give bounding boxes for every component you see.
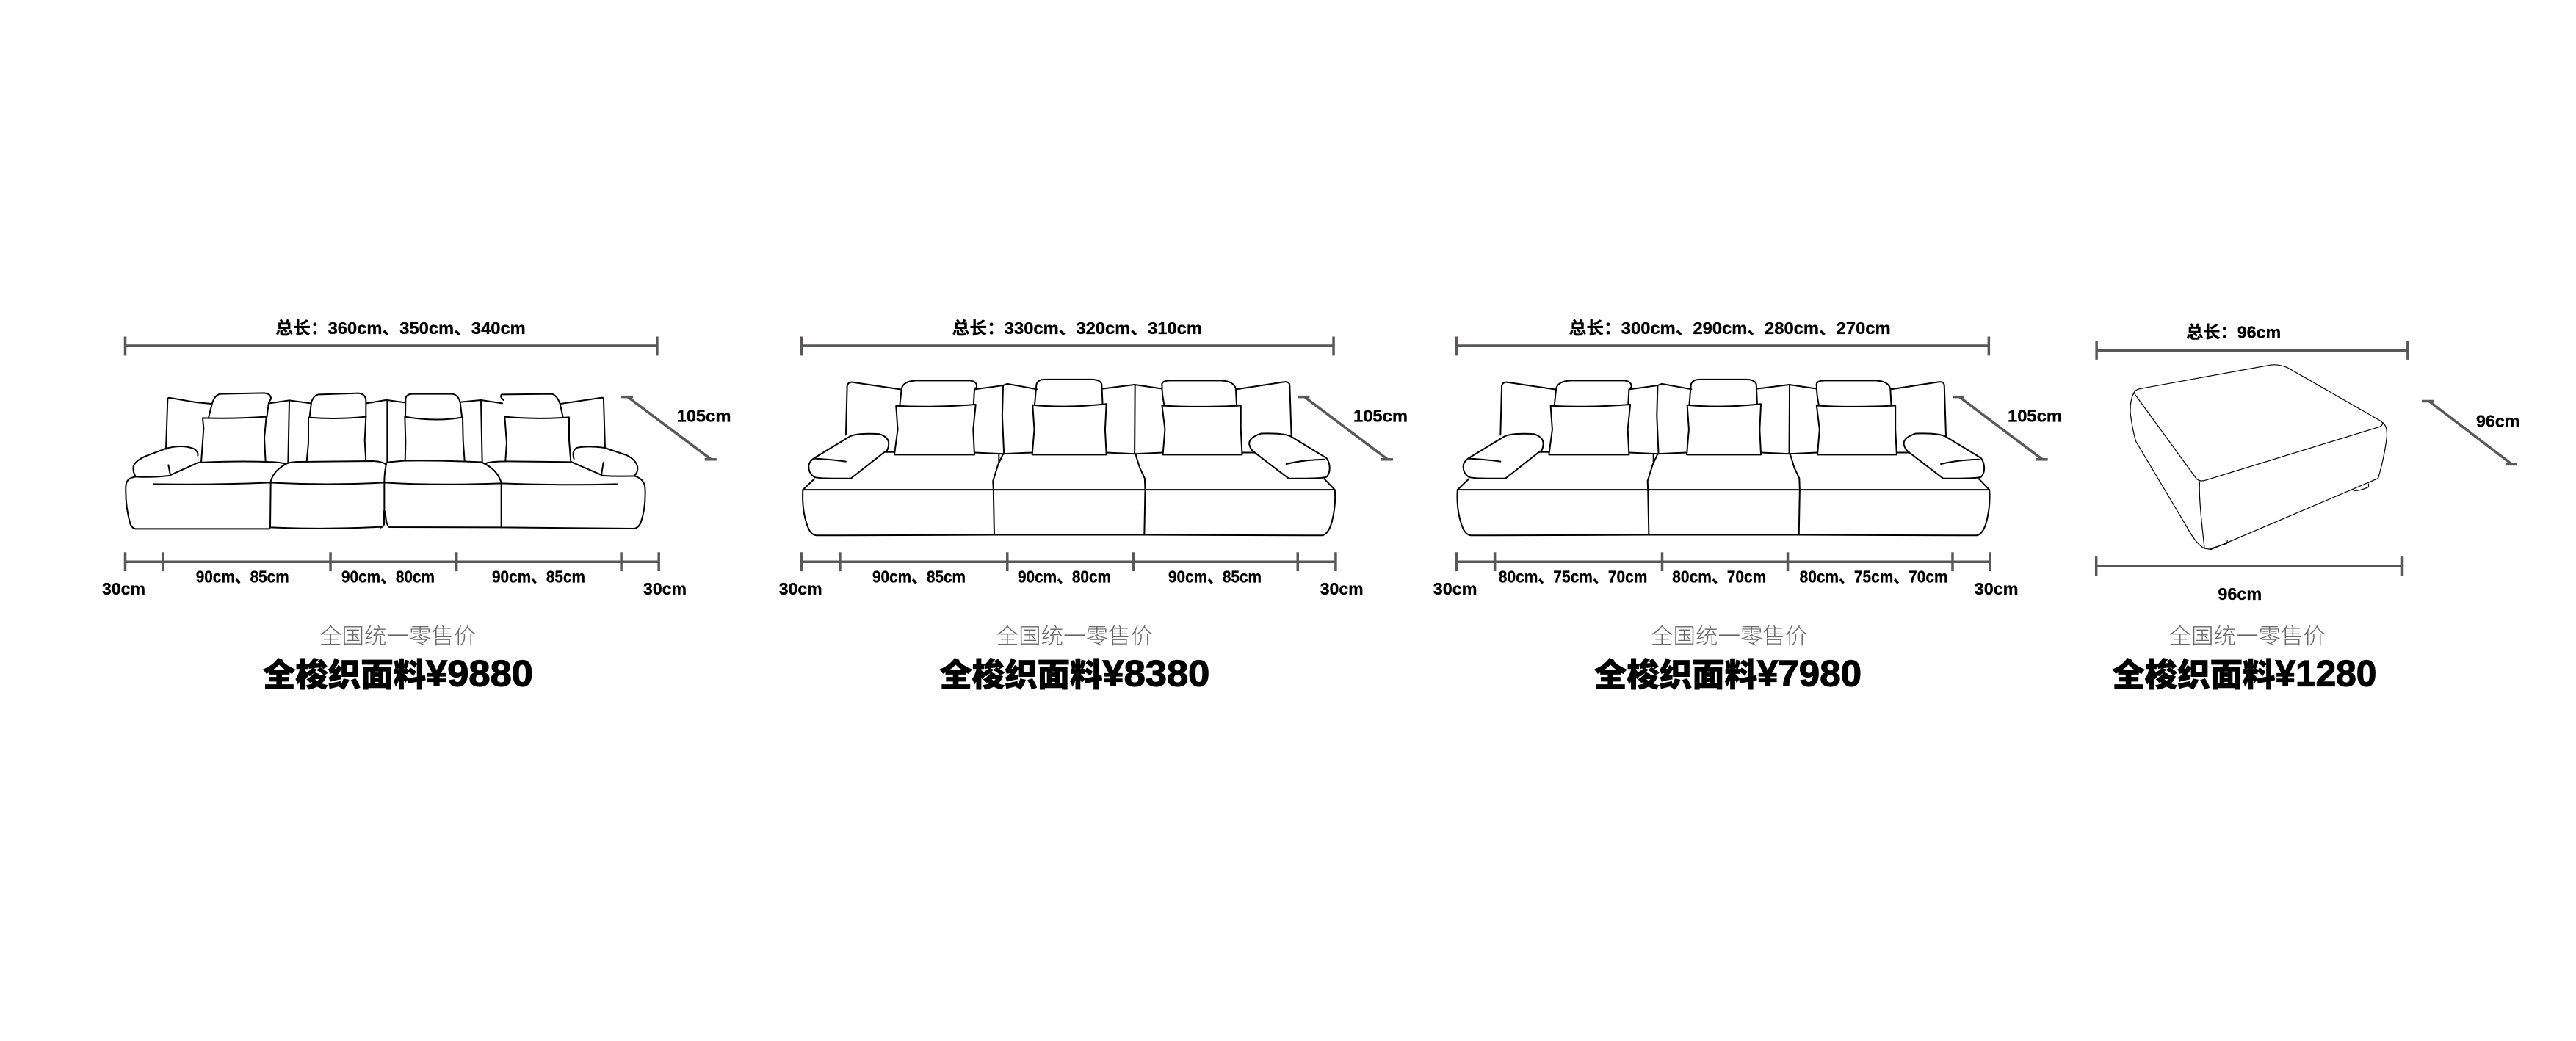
price: 7980: ¥7980: [1757, 653, 1862, 694]
dimension lines: four-seat sofa: [126, 336, 717, 571]
line drawing: four-seat sofa: [126, 393, 645, 529]
label: depth: 105cm: [1353, 407, 1408, 426]
label: total length: 总长：96cm: [2186, 323, 2281, 342]
price: 7980: [1594, 653, 1862, 694]
subtitle: retail price: 全国统一零售价: [2169, 625, 2326, 649]
label: seat one width: 90cm、85cm: [872, 567, 966, 586]
price: 9880: [263, 653, 533, 694]
label: seat two width: 90cm、80cm: [1018, 567, 1111, 586]
label: depth: 105cm: [2008, 407, 2062, 426]
label: total length: 总长：360cm、350cm、340cm: [275, 319, 526, 338]
dimension lines: ottoman: [2096, 341, 2517, 576]
line drawing: three-seat sofa small: [1457, 380, 1990, 535]
label: width: 96cm: [2218, 584, 2262, 603]
label: left arm width: 30cm: [1433, 579, 1477, 598]
dimension lines: three-seat sofa small: [1456, 336, 2048, 571]
price: 1280: ¥1280: [2275, 653, 2376, 694]
label: left arm width: 30cm: [102, 579, 145, 598]
price: 8380: ¥8380: [1102, 653, 1209, 694]
panel: three-seat sofa small: [1433, 319, 2062, 694]
label: seat two width: 80cm、70cm: [1672, 567, 1766, 586]
label: depth: 105cm: [677, 407, 731, 426]
label: right arm width: 30cm: [643, 579, 687, 598]
line drawing: three-seat sofa large: [803, 380, 1335, 535]
panel: four-seat sofa: [102, 319, 731, 694]
price: 8380: 全梭织面料: [939, 658, 1102, 693]
label: seat one width: 90cm、85cm: [196, 567, 289, 586]
label: right arm width: 30cm: [1320, 579, 1364, 598]
label: total length: 总长：300cm、290cm、280cm、270cm: [1569, 319, 1891, 338]
label: seat two width: 90cm、80cm: [341, 567, 435, 586]
line drawing: ottoman: [2130, 365, 2387, 550]
price: 1280: [2112, 653, 2376, 694]
panel: three-seat sofa large: [779, 319, 1408, 694]
label: seat one width: 80cm、75cm、70cm: [1499, 567, 1647, 586]
subtitle: retail price: 全国统一零售价: [996, 625, 1153, 649]
price: 8380: [939, 653, 1209, 694]
label: left arm width: 30cm: [779, 579, 822, 598]
price: 9880: 全梭织面料: [263, 658, 426, 693]
price: 7980: 全梭织面料: [1594, 658, 1757, 693]
label: seat three width: 90cm、85cm: [492, 567, 585, 586]
dimension lines: three-seat sofa large: [802, 336, 1393, 571]
subtitle: retail price: 全国统一零售价: [1651, 625, 1808, 649]
label: depth: 96cm: [2476, 411, 2520, 430]
price: 1280: 全梭织面料: [2112, 658, 2275, 693]
label: seat three width: 80cm、75cm、70cm: [1800, 567, 1948, 586]
price: 9880: ¥9880: [426, 653, 533, 694]
label: seat three width: 90cm、85cm: [1168, 567, 1262, 586]
subtitle: retail price: 全国统一零售价: [319, 625, 476, 649]
panel: ottoman: [2096, 323, 2520, 694]
label: total length: 总长：330cm、320cm、310cm: [952, 319, 1202, 338]
label: right arm width: 30cm: [1975, 579, 2018, 598]
